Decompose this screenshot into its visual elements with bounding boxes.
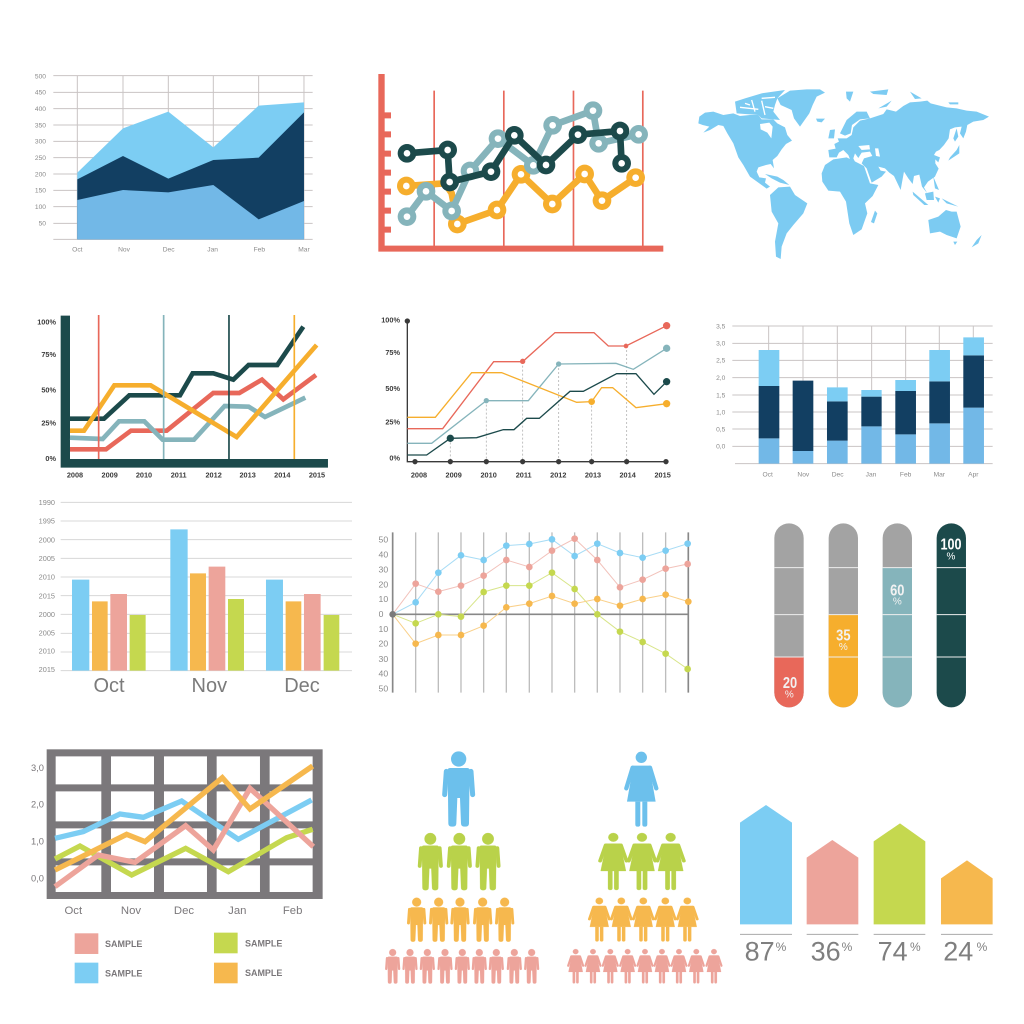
y axis labels: 3,0 [716, 341, 726, 348]
y axis labels: 150 [35, 188, 46, 195]
y axis labels: 300 [35, 139, 46, 146]
y axis labels: 40 [379, 549, 388, 559]
map: New Zealand [953, 235, 982, 247]
origin dot [389, 611, 396, 618]
axes [393, 532, 688, 693]
y axis labels [381, 315, 400, 462]
x axis labels [72, 247, 310, 254]
series: red [407, 322, 670, 429]
arrow bar: 36 percent [807, 840, 858, 967]
y axis labels: 2015 [39, 665, 55, 674]
series: pink [393, 535, 691, 614]
bars: navy [759, 355, 984, 451]
map: North America [698, 112, 792, 189]
panel: positive negative line chart [379, 532, 692, 694]
y axis labels: 0,0 [31, 873, 44, 883]
pyramid: women [568, 752, 721, 983]
y axis labels: 30 [379, 654, 388, 664]
panel: stacked bar chart [716, 323, 993, 479]
bars: yellow [92, 573, 301, 671]
y axis labels [716, 323, 726, 451]
grouped bar grid [61, 502, 352, 671]
arrow bar: 36 percent: % [842, 940, 853, 954]
dotted droplines [450, 346, 627, 462]
y axis labels: 200 [35, 171, 46, 178]
y axis labels: 0,0 [716, 444, 726, 451]
arrow bar: 74 percent: % [910, 940, 921, 954]
series: yellow [393, 591, 692, 647]
y axis labels: 2000 [39, 610, 55, 619]
series lines [55, 766, 313, 887]
bars: blue [72, 529, 283, 671]
y axis labels [35, 73, 46, 228]
x axis labels: Mar [298, 247, 310, 254]
area: navy [77, 112, 304, 239]
gauge: 60 percent [883, 523, 912, 707]
y axis labels: 25% [41, 419, 56, 428]
y axis labels: 2010 [39, 647, 55, 656]
y axis labels: 350 [35, 122, 46, 129]
arrow bar: 24 percent: % [977, 940, 988, 954]
legend: SAMPLE [105, 968, 142, 978]
y axis labels: 2000 [39, 535, 55, 544]
y axis labels: 2005 [39, 554, 55, 563]
y axis labels [31, 763, 44, 883]
x axis labels: Feb [283, 905, 302, 917]
map: Greenland [777, 89, 825, 127]
legend: SAMPLE [245, 968, 282, 978]
map: Japan and Sakhalin [948, 128, 959, 161]
x axis labels: Dec [163, 247, 175, 254]
map: Caribbean [765, 174, 789, 185]
y axis labels [379, 534, 388, 694]
x axis labels: 2011 [171, 471, 187, 480]
legend: SAMPLE [105, 939, 142, 949]
x axis labels: Jan [866, 472, 877, 479]
x axis labels: 2010 [136, 471, 152, 480]
y axis labels: 2010 [39, 573, 55, 582]
y axis labels: 100 [35, 204, 46, 211]
y axis labels: 100% [37, 317, 56, 326]
map: British Isles [828, 129, 835, 138]
y axis labels [37, 317, 56, 463]
gauge: 100 percent [937, 523, 966, 707]
y axis labels: 250 [35, 155, 46, 162]
x axis labels: Dec [174, 905, 194, 917]
panel: world map [698, 89, 989, 259]
series: dark [407, 374, 670, 455]
pyramid: men [386, 751, 538, 984]
x axis labels: 2011 [516, 471, 532, 480]
map: Australia [928, 210, 961, 238]
series: green [393, 569, 691, 672]
x axis labels: 2015 [654, 471, 671, 480]
x axis labels: Nov [118, 247, 131, 254]
legend: SAMPLE [245, 938, 282, 948]
series: yellow [397, 165, 645, 233]
x axis labels: Feb [900, 472, 912, 479]
x axis labels: 2013 [239, 471, 256, 480]
axes and ticks [378, 74, 663, 252]
y axis labels: 500 [35, 73, 46, 80]
x axis labels: Nov [797, 472, 810, 479]
area: light blue [77, 102, 304, 239]
map: Madagascar [871, 211, 877, 223]
panel: stacked area chart [35, 73, 313, 254]
panel: thick line chart [37, 315, 328, 480]
y axis labels: 25% [385, 417, 400, 426]
y axis labels: 50 [39, 221, 46, 228]
x axis labels: 2008 [411, 471, 427, 480]
x axis labels: 2014 [619, 471, 637, 480]
series: dark [398, 122, 631, 191]
panel: arrow bar percentages [740, 805, 993, 967]
y axis labels: 20 [379, 579, 388, 589]
y axis labels: 1995 [39, 517, 55, 526]
y axis labels: 50% [385, 384, 400, 393]
chart frame [47, 749, 323, 899]
bars: pink [110, 567, 321, 671]
x axis labels: 2009 [102, 471, 118, 480]
y axis labels: 2,5 [716, 358, 726, 365]
x axis labels: Oct [65, 905, 83, 917]
map: inland seas [858, 145, 880, 157]
arrow bar: 74 percent [874, 823, 925, 967]
series: yellow [407, 373, 670, 417]
map: archipelago channels [740, 97, 775, 115]
month labels: Nov [192, 675, 227, 697]
y axis labels: 0% [389, 453, 400, 462]
y axis labels: 1990 [39, 498, 55, 507]
y axis labels: 1,0 [31, 836, 44, 846]
panel: grouped bar chart [39, 498, 352, 697]
panel: people pyramids [386, 751, 721, 984]
y axis labels: 1,5 [716, 392, 726, 399]
y axis labels: 0% [45, 454, 56, 463]
y axis labels: 450 [35, 90, 46, 97]
x axis labels: Apr [968, 472, 979, 479]
y axis labels: 40 [379, 669, 388, 679]
arrow bar: 74 percent: 74 [878, 937, 908, 967]
y axis labels: 1,0 [716, 409, 726, 416]
y axis labels: 3,0 [31, 763, 44, 773]
map: Arctic archipelago [735, 90, 785, 120]
series: teal [398, 101, 648, 226]
gauge: 20 percent: % [785, 689, 794, 700]
series: teal [407, 345, 670, 443]
y axis labels: 2005 [39, 628, 55, 637]
arrow bar: 24 percent: 24 [943, 937, 973, 967]
gauge: 60 percent: % [893, 597, 902, 608]
x axis labels: 2010 [480, 471, 497, 480]
y axis labels: 10 [379, 594, 388, 604]
y axis labels: 50 [379, 534, 388, 544]
gauge: 35 percent: 35 [836, 628, 851, 645]
x axis labels: 2012 [205, 471, 222, 480]
map: Arctic Russia islands [846, 89, 958, 108]
y axis labels: 400 [35, 106, 46, 113]
month labels: Oct [93, 675, 125, 697]
arrow bar: 24 percent [941, 860, 993, 967]
y axis labels: 2,0 [31, 800, 44, 810]
x axis labels: 2009 [446, 471, 462, 480]
panel: percentage gauges [774, 523, 966, 707]
arrow bar: 36 percent: 36 [811, 937, 841, 967]
x axis labels: 2014 [274, 471, 291, 480]
series lines [70, 327, 317, 449]
x axis labels [762, 472, 979, 479]
month labels [93, 675, 320, 697]
gauge: 20 percent [774, 523, 804, 707]
gauge: 35 percent: % [839, 642, 848, 653]
y axis labels: 100% [381, 315, 400, 324]
axis dots [405, 318, 669, 464]
y axis labels: 75% [385, 348, 400, 357]
gauge: 100 percent: % [947, 551, 956, 562]
panel: thin line chart with dots [381, 315, 671, 480]
x axis labels: Oct [72, 247, 83, 254]
x axis labels: 2015 [309, 471, 325, 480]
axes [61, 316, 328, 468]
series: blue [393, 536, 691, 614]
map: South America [770, 187, 807, 259]
gauge: 100 percent: 100 [940, 537, 961, 554]
x axis labels [65, 905, 302, 917]
x axis labels: 2012 [550, 471, 566, 480]
x axis labels: Mar [934, 472, 946, 479]
gauge: 35 percent [829, 523, 858, 707]
arrow bar: 87 percent: 87 [745, 937, 775, 967]
x axis labels: Jan [228, 905, 246, 917]
arrow bar: 87 percent [740, 805, 792, 967]
y axis labels: 10 [379, 624, 388, 634]
gauge: 20 percent: 20 [783, 675, 797, 692]
frame cells [56, 756, 313, 892]
y axis labels: 2015 [39, 591, 55, 600]
x axis labels [411, 471, 671, 480]
map: Indonesia and Philippines [913, 177, 958, 207]
y axis labels: 75% [41, 350, 56, 359]
map: Africa [822, 157, 878, 235]
vertical grid lines [416, 532, 666, 693]
map: Eurasia [828, 101, 989, 193]
panel: framed line chart with legend [31, 749, 323, 983]
y axis labels [39, 498, 55, 674]
bars: green [130, 599, 339, 671]
gauge: 60 percent: 60 [890, 582, 904, 599]
x axis labels: 2013 [585, 471, 601, 480]
x axis labels: Oct [762, 472, 773, 479]
bars: mid blue [759, 408, 984, 464]
map: Hudson Bay [760, 123, 773, 138]
y axis labels: 0,5 [716, 426, 726, 433]
y axis labels: 50% [41, 386, 56, 395]
vertical markers [99, 315, 294, 459]
month labels: Dec [284, 675, 320, 697]
x axis labels: Feb [254, 247, 265, 254]
y axis labels: 30 [379, 564, 388, 574]
bars: light blue [759, 337, 984, 401]
y axis labels: 2,0 [716, 375, 726, 382]
arrow bar: 87 percent: % [776, 940, 787, 954]
legend [75, 933, 282, 983]
bar chart grid [732, 326, 993, 464]
panel: ring marker line chart [378, 74, 663, 252]
x axis labels: Dec [832, 472, 844, 479]
x axis labels: Nov [121, 905, 141, 917]
y axis labels: 0 [379, 609, 384, 619]
y axis labels: 50 [379, 684, 388, 694]
map: Scandinavia [840, 112, 870, 136]
y axis labels: 20 [379, 639, 388, 649]
x axis labels: 2008 [67, 471, 83, 480]
y axis labels: 3,5 [716, 323, 726, 330]
x axis labels [67, 471, 325, 480]
map: Iceland [816, 119, 825, 122]
axes [407, 321, 666, 462]
x axis labels: Jan [207, 247, 218, 254]
area chart grid [53, 76, 313, 239]
area: mid blue [77, 185, 304, 239]
